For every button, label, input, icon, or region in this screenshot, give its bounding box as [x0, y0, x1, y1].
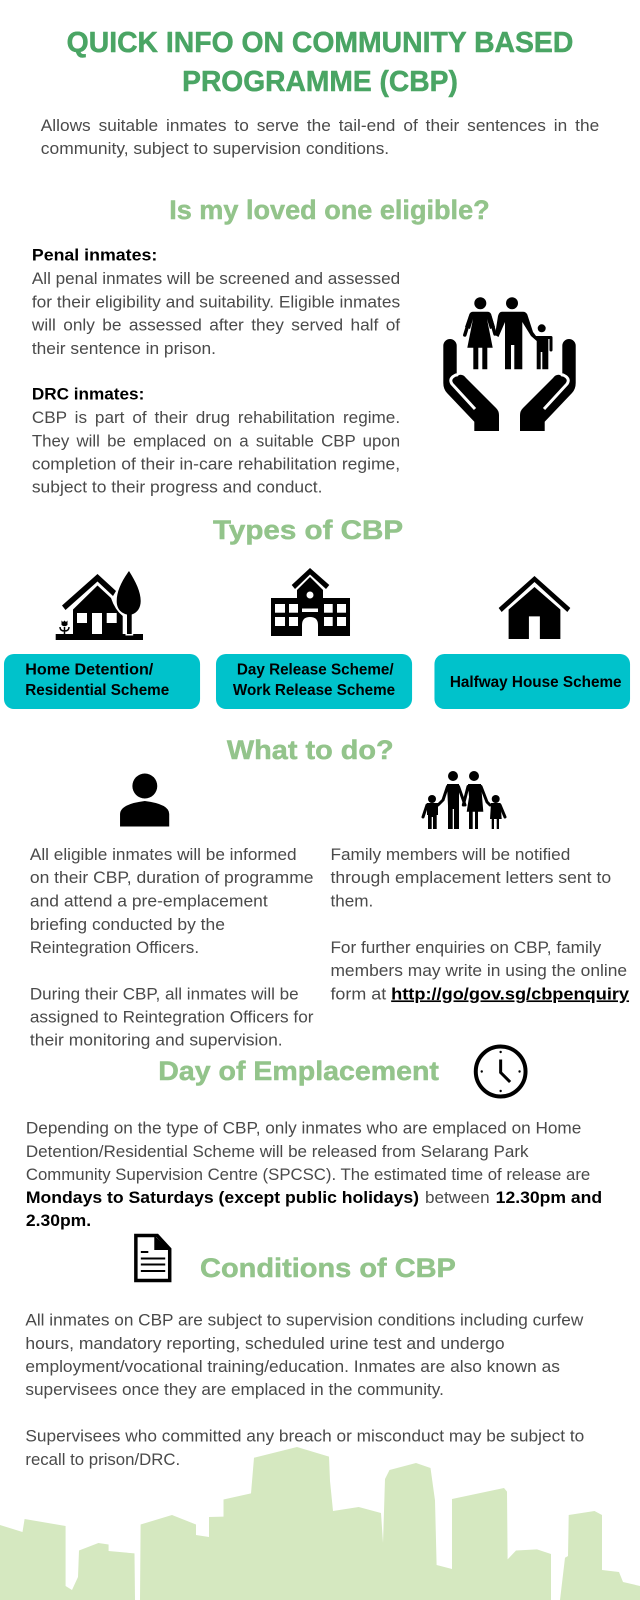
text block: day of emplacement: Community Supervision Centre (SPCSC). The estimated time of release are: [26, 1166, 590, 1184]
text column: inmates: their monitoring and supervision.: [30, 1031, 283, 1050]
text column: family members: form at: [330, 985, 387, 1003]
text block: conditions: [25, 1312, 584, 1469]
icon: person: [120, 774, 169, 826]
text column: family members: Family members will be notified: [330, 846, 570, 864]
text block: conditions: All inmates on CBP are subject to supervision conditions including curfew: [25, 1312, 583, 1330]
text block: penal inmates: will only be assessed after they served half of: [31, 317, 401, 335]
text block: conditions: hours, mandatory reporting, scheduled urine test and undergo: [25, 1335, 505, 1353]
text block: penal inmates: All penal inmates will be screened and assessed: [32, 270, 400, 288]
icon: simple house: [499, 576, 570, 639]
button: day release: Work Release Scheme: [233, 682, 396, 699]
text block: conditions: supervisees once they are emplaced in the community.: [25, 1381, 444, 1399]
button: day release: Day Release Scheme/: [237, 662, 394, 679]
text column: family members: members may write in using the online: [330, 962, 627, 980]
text block: day of emplacement: between: [425, 1189, 490, 1207]
intro text: Allows suitable inmates to serve the tail-end of their sentences in the: [41, 117, 599, 135]
heading: what to do: What to do?: [227, 735, 394, 765]
button: halfway house: Halfway House Scheme: [450, 674, 622, 691]
text column: inmates: [30, 846, 314, 1050]
button: halfway house: [434, 654, 630, 709]
intro text: community, subject to supervision conditions.: [41, 140, 389, 158]
text column: inmates: assigned to Reintegration Officers for: [30, 1008, 314, 1027]
text column: inmates: All eligible inmates will be informed: [30, 846, 297, 864]
icon: school building: [271, 568, 350, 636]
icon: family of four: [423, 771, 505, 829]
text block: DRC inmates: CBP is part of their drug rehabilitation regime.: [32, 409, 400, 427]
text column: family members: http://go/gov.sg/cbpenquiry: [391, 985, 630, 1003]
text column: inmates: and attend a pre-emplacement: [30, 893, 268, 911]
text block: conditions: Supervisees who committed any breach or misconduct may be subject to: [25, 1428, 584, 1446]
text block: DRC inmates: DRC inmates:: [32, 386, 144, 404]
text block: day of emplacement: Depending on the type of CBP, only inmates who are emplaced on Home: [26, 1119, 581, 1138]
text block: DRC inmates: completion of their in-care rehabilitation regime,: [32, 455, 400, 474]
icon: house with tree: [56, 571, 143, 640]
heading: types of CBP: Types of CBP: [213, 515, 403, 545]
text block: penal inmates: Penal inmates:: [32, 246, 157, 265]
heading: day of emplacement: Day of Emplacement: [158, 1056, 439, 1086]
text column: inmates: During their CBP, all inmates will be: [30, 985, 299, 1003]
icon: hands holding family: [443, 297, 576, 431]
text column: inmates: briefing conducted by the: [30, 916, 225, 934]
button: home detention: Residential Scheme: [25, 682, 170, 699]
skyline: [0, 1447, 640, 1600]
icon: clock: [476, 1046, 526, 1096]
text block: penal inmates: for their eligibility and suitability. Eligible inmates: [32, 293, 400, 311]
icon: document: [136, 1236, 170, 1280]
text column: inmates: on their CBP, duration of programme: [30, 869, 314, 887]
button: home detention: Home Detention/: [25, 662, 154, 679]
intro text: [41, 117, 599, 158]
text column: family members: them.: [330, 893, 373, 911]
text block: day of emplacement: [26, 1119, 602, 1230]
text block: day of emplacement: 2.30pm.: [26, 1212, 91, 1230]
text column: family members: [330, 846, 630, 1003]
text block: DRC inmates: [32, 386, 400, 497]
text block: DRC inmates: subject to their progress and conduct.: [32, 479, 322, 497]
text block: penal inmates: their sentence in prison.: [32, 340, 216, 358]
text column: family members: through emplacement letters sent to: [330, 869, 611, 887]
text block: day of emplacement: 12.30pm and: [496, 1189, 602, 1207]
text block: day of emplacement: Mondays to Saturdays (except public holidays): [26, 1189, 419, 1207]
text column: inmates: Reintegration Officers.: [30, 939, 199, 957]
text block: DRC inmates: They will be emplaced on a suitable CBP upon: [32, 432, 400, 450]
heading: eligibility: Is my loved one eligible?: [169, 195, 490, 225]
text block: penal inmates: [31, 246, 401, 358]
title: [67, 27, 573, 98]
button: day release: [216, 654, 412, 709]
title: QUICK INFO ON COMMUNITY BASED: [67, 27, 573, 59]
heading: conditions of CBP: Conditions of CBP: [200, 1253, 456, 1283]
button: home detention: [4, 654, 200, 709]
text column: family members: For further enquiries on CBP, family: [330, 939, 602, 957]
text block: conditions: employment/vocational training/education. Inmates are also known as: [25, 1358, 560, 1376]
title: PROGRAMME (CBP): [182, 66, 458, 98]
text block: day of emplacement: Detention/Residential Scheme will be released from Selarang Park: [26, 1143, 529, 1161]
text block: conditions: recall to prison/DRC.: [25, 1451, 180, 1469]
